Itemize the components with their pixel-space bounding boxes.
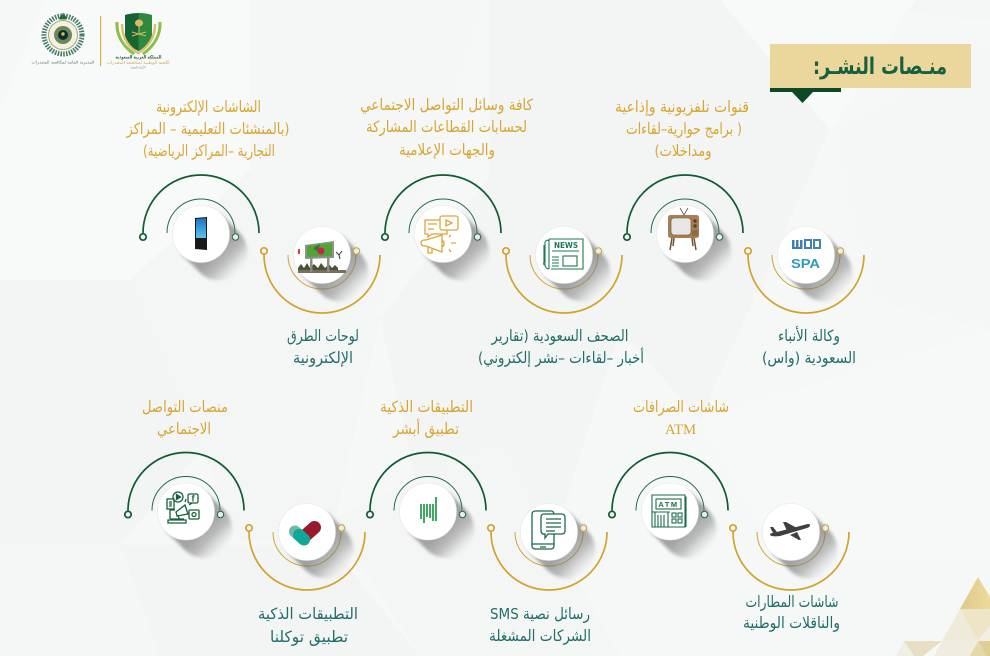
item: social media platforms xyxy=(125,398,244,569)
icon: billboard xyxy=(298,241,346,273)
item: TV and radio channels: ومداخلات) xyxy=(654,142,712,161)
decoration: gold triangles bottom right xyxy=(896,577,990,656)
item: social media platforms: الاجتماعي xyxy=(157,420,211,439)
item: electronic road billboards xyxy=(261,226,380,368)
icon: newspaper: NEWS xyxy=(554,241,578,250)
logo: Saudi National Committee for Narcotics Control: اللجنة الوطنية لمكافحة المخدرات xyxy=(106,60,170,66)
item: Tawakkalna smart app: تطبيق توكلنا xyxy=(270,628,348,646)
icon: kiosk screen xyxy=(195,217,207,250)
icon: SPA logo: SPA xyxy=(791,256,821,271)
item: electronic road billboards: الإلكترونية xyxy=(293,349,353,368)
item: Absher smart app: التطبيقات الذكية xyxy=(380,398,473,416)
icon: retro television xyxy=(668,208,699,250)
logo: Saudi National Committee for Narcotics Control: المملكة العربية السعودية xyxy=(116,54,162,60)
item: Saudi Press Agency: وكالة الأنباء xyxy=(778,326,840,346)
item: Absher smart app: تطبيق أبشر xyxy=(392,418,459,438)
item: all social media channels: كافة وسائل التواصل الاجتماعي xyxy=(360,96,534,115)
icon: phone with message xyxy=(532,511,565,549)
item: SMS messages: رسائل نصية SMS xyxy=(490,605,590,623)
icon: Tawakkalna logo xyxy=(295,528,314,540)
item: electronic screens: الشاشات الإلكترونية xyxy=(156,98,261,117)
item: Saudi newspapers: الصحف السعودية (تقارير xyxy=(491,327,628,345)
item: airport and national carrier screens xyxy=(730,504,849,633)
heading: publishing platforms: منـصات النشـر: xyxy=(813,54,947,80)
divider between logos xyxy=(100,16,101,66)
item: Tawakkalna smart app: التطبيقات الذكية xyxy=(258,605,358,623)
item: ATM screens: شاشات الصرافات xyxy=(633,398,729,416)
icon: newspaper xyxy=(544,239,583,269)
item: SMS messages: الشركات المشغلة xyxy=(489,627,591,645)
item: electronic screens: (بالمنشئات التعليمية – المراكز xyxy=(126,120,290,138)
item: Saudi newspapers xyxy=(478,226,644,368)
logo: General Directorate for Narcotics Control: المديرية العامة لمكافحة المخدرات xyxy=(32,60,94,64)
item: Saudi Press Agency xyxy=(745,226,864,368)
item: all social media channels xyxy=(360,96,534,292)
item: TV and radio channels: قنوات تلفزيونية وإذاعية xyxy=(615,98,749,117)
icon: SPA logo xyxy=(791,240,821,271)
item: electronic road billboards: لوحات الطرق xyxy=(287,327,359,345)
item: Absher smart app xyxy=(367,398,486,569)
icon: social media megaphone xyxy=(167,492,199,523)
icon: Absher logo xyxy=(421,497,436,523)
icon: ATM machine xyxy=(652,495,686,527)
icon: airplane xyxy=(770,522,810,540)
item: ATM screens xyxy=(609,398,729,569)
item: electronic screens xyxy=(126,98,290,292)
logo: Saudi National Committee for Narcotics Control xyxy=(106,13,170,70)
logo: General Directorate for Narcotics Control xyxy=(32,13,94,64)
item: Tawakkalna smart app xyxy=(246,504,365,646)
item: social media platforms: منصات التواصل xyxy=(142,398,228,416)
item: TV and radio channels xyxy=(615,98,749,292)
item: electronic screens: التجارية –المراكز الرياضية) xyxy=(143,142,275,160)
icon: megaphone and chat xyxy=(421,216,458,253)
item: Saudi Press Agency: السعودية (واس) xyxy=(762,349,856,368)
item: SMS messages xyxy=(488,504,607,645)
item: all social media channels: والجهات الإعلامية xyxy=(399,141,495,160)
icon: social media megaphone: f xyxy=(192,494,196,504)
item: TV and radio channels: ( برامج حوارية–لقاءات xyxy=(626,120,742,138)
item: all social media channels: لحسابات القطاعات المشاركة xyxy=(366,118,527,136)
item: ATM screens: ATM xyxy=(665,422,696,438)
item: Saudi newspapers: أخبار –لقاءات –نشر إلكتروني) xyxy=(478,347,644,368)
logo: Saudi National Committee for Narcotics Control: الأمانة العامة xyxy=(130,64,146,70)
icon: ATM machine: ATM xyxy=(658,500,679,509)
item: airport and national carrier screens: شاشات المطارات xyxy=(746,593,838,611)
item: airport and national carrier screens: والناقلات الوطنية xyxy=(743,614,840,633)
heading: publishing platforms xyxy=(770,44,971,103)
